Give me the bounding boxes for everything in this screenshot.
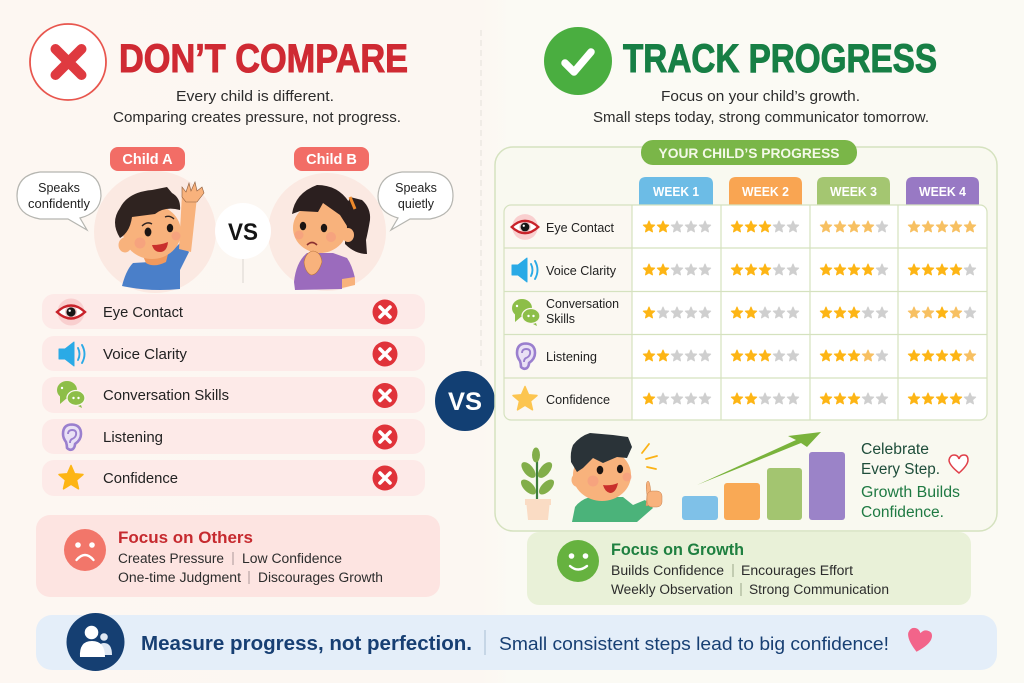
text: compare intro — [113, 89, 401, 126]
text: small steps slogan: Small consistent steps lead to big confidence! — [499, 634, 889, 654]
text: effects of comparison: One-time Judgment — [118, 570, 241, 585]
row: listening: Listening — [103, 430, 163, 446]
text: celebrate every step: Celebrate — [861, 441, 929, 458]
text: progress intro: Focus on your child’s growth. — [661, 89, 860, 105]
text: progress intro — [593, 89, 929, 126]
week headers: WEEK 2 — [742, 184, 789, 199]
row: confidence: Confidence — [103, 471, 178, 487]
text: compare intro: Comparing creates pressure, not progress. — [113, 110, 401, 126]
text: effects of tracking — [611, 563, 889, 597]
panel: your child's progress — [495, 140, 997, 531]
label: child a: Child A — [122, 152, 173, 168]
row: eye contact — [42, 294, 425, 329]
banner: measure progress — [36, 613, 997, 671]
chart: rising bars with arrow — [682, 432, 845, 520]
row: eye contact ratings — [512, 214, 976, 240]
illustration: potted plant — [518, 448, 557, 520]
panel: don't compare header — [30, 24, 408, 126]
speech bubble: speaks quietly: Speaks — [395, 181, 437, 195]
badge: small vs — [215, 203, 271, 283]
heading pill: your child's progress — [641, 140, 857, 165]
text: measure progress slogan: Measure progress, not perfection. — [141, 633, 472, 655]
label: child b — [294, 147, 369, 171]
week headers: WEEK 3 — [830, 184, 877, 199]
row: voice clarity: Voice Clarity — [103, 347, 188, 363]
row: conversation skills — [42, 377, 425, 413]
heading: focus on growth: Focus on Growth — [611, 541, 744, 559]
icon: smiling face — [557, 540, 599, 582]
label: child a — [110, 147, 185, 171]
icon: outline heart — [949, 455, 968, 473]
panel: child comparison — [17, 147, 453, 293]
text: compare intro: Every child is different. — [176, 89, 334, 105]
badge: center vs: VS — [448, 388, 482, 416]
speech bubble: speaks confidently — [17, 172, 101, 230]
speech bubble: speaks quietly — [378, 172, 453, 230]
text: effects of comparison: Low Confidence — [242, 551, 342, 566]
row: conversation skills ratings: Conversation — [546, 297, 619, 311]
row: confidence — [42, 460, 425, 496]
row: conversation skills: Conversation Skills — [103, 388, 229, 404]
row: voice clarity — [42, 336, 425, 371]
row: voice clarity ratings: Voice Clarity — [546, 264, 617, 278]
text: celebrate every step: Confidence. — [861, 504, 944, 521]
week headers: WEEK 4 — [919, 184, 967, 199]
list: comparison rows — [42, 294, 425, 496]
panel: focus on others — [36, 515, 440, 597]
illustration: child b thinking — [268, 173, 386, 291]
row: confidence ratings — [513, 386, 976, 410]
heading: focus on others: Focus on Others — [118, 529, 253, 547]
row: eye contact: Eye Contact — [103, 305, 183, 321]
badge: center vs — [435, 371, 495, 431]
illustration: happy boy thumbs up — [571, 433, 662, 522]
icon: red cross badge — [30, 24, 106, 100]
icon: pink heart — [905, 627, 933, 654]
panel: focus on growth — [527, 532, 971, 605]
heading: don't compare: DON’T COMPARE — [119, 37, 408, 81]
speech bubble: speaks quietly: quietly — [398, 197, 435, 211]
heading pill: your child's progress: YOUR CHILD’S PROGRESS — [658, 145, 840, 161]
text: celebrate every step: Growth Builds — [861, 484, 960, 501]
row: listening ratings: Listening — [546, 350, 597, 364]
text: effects of tracking: Builds Confidence — [611, 563, 724, 578]
row: voice clarity ratings — [512, 258, 976, 282]
text: progress intro: Small steps today, strong communicator tomorrow. — [593, 110, 929, 126]
speech bubble: speaks confidently: confidently — [28, 197, 91, 211]
row: listening — [42, 419, 425, 454]
table: weekly star ratings — [504, 205, 987, 420]
illustration: child a raising hand — [94, 171, 216, 293]
heading: track progress: TRACK PROGRESS — [623, 37, 937, 81]
text: celebrate every step — [861, 441, 960, 521]
row: listening ratings — [517, 344, 976, 369]
icon: green check badge — [544, 27, 612, 95]
icon: parent and child — [66, 613, 124, 671]
text: effects of tracking: Encourages Effort — [741, 563, 853, 578]
week headers — [639, 177, 979, 206]
icon: sad face — [64, 529, 106, 571]
text: effects of comparison — [118, 551, 383, 585]
row: conversation skills ratings: Skills — [546, 312, 575, 326]
text: celebrate every step: Every Step. — [861, 461, 940, 478]
text: effects of tracking: Weekly Observation — [611, 582, 733, 597]
badge: small vs: VS — [228, 219, 258, 246]
arrow: growth trend — [697, 432, 821, 485]
panel: track progress header — [544, 27, 937, 126]
row: conversation skills ratings — [512, 297, 976, 326]
row: eye contact ratings: Eye Contact — [546, 221, 615, 235]
speech bubble: speaks confidently: Speaks — [38, 181, 80, 195]
text: effects of tracking: Strong Communication — [749, 582, 889, 597]
row: confidence ratings: Confidence — [546, 393, 610, 407]
label: child b: Child B — [306, 152, 357, 168]
week headers: WEEK 1 — [653, 184, 699, 199]
text: effects of comparison: Creates Pressure — [118, 551, 224, 566]
text: effects of comparison: Discourages Growth — [258, 570, 383, 585]
